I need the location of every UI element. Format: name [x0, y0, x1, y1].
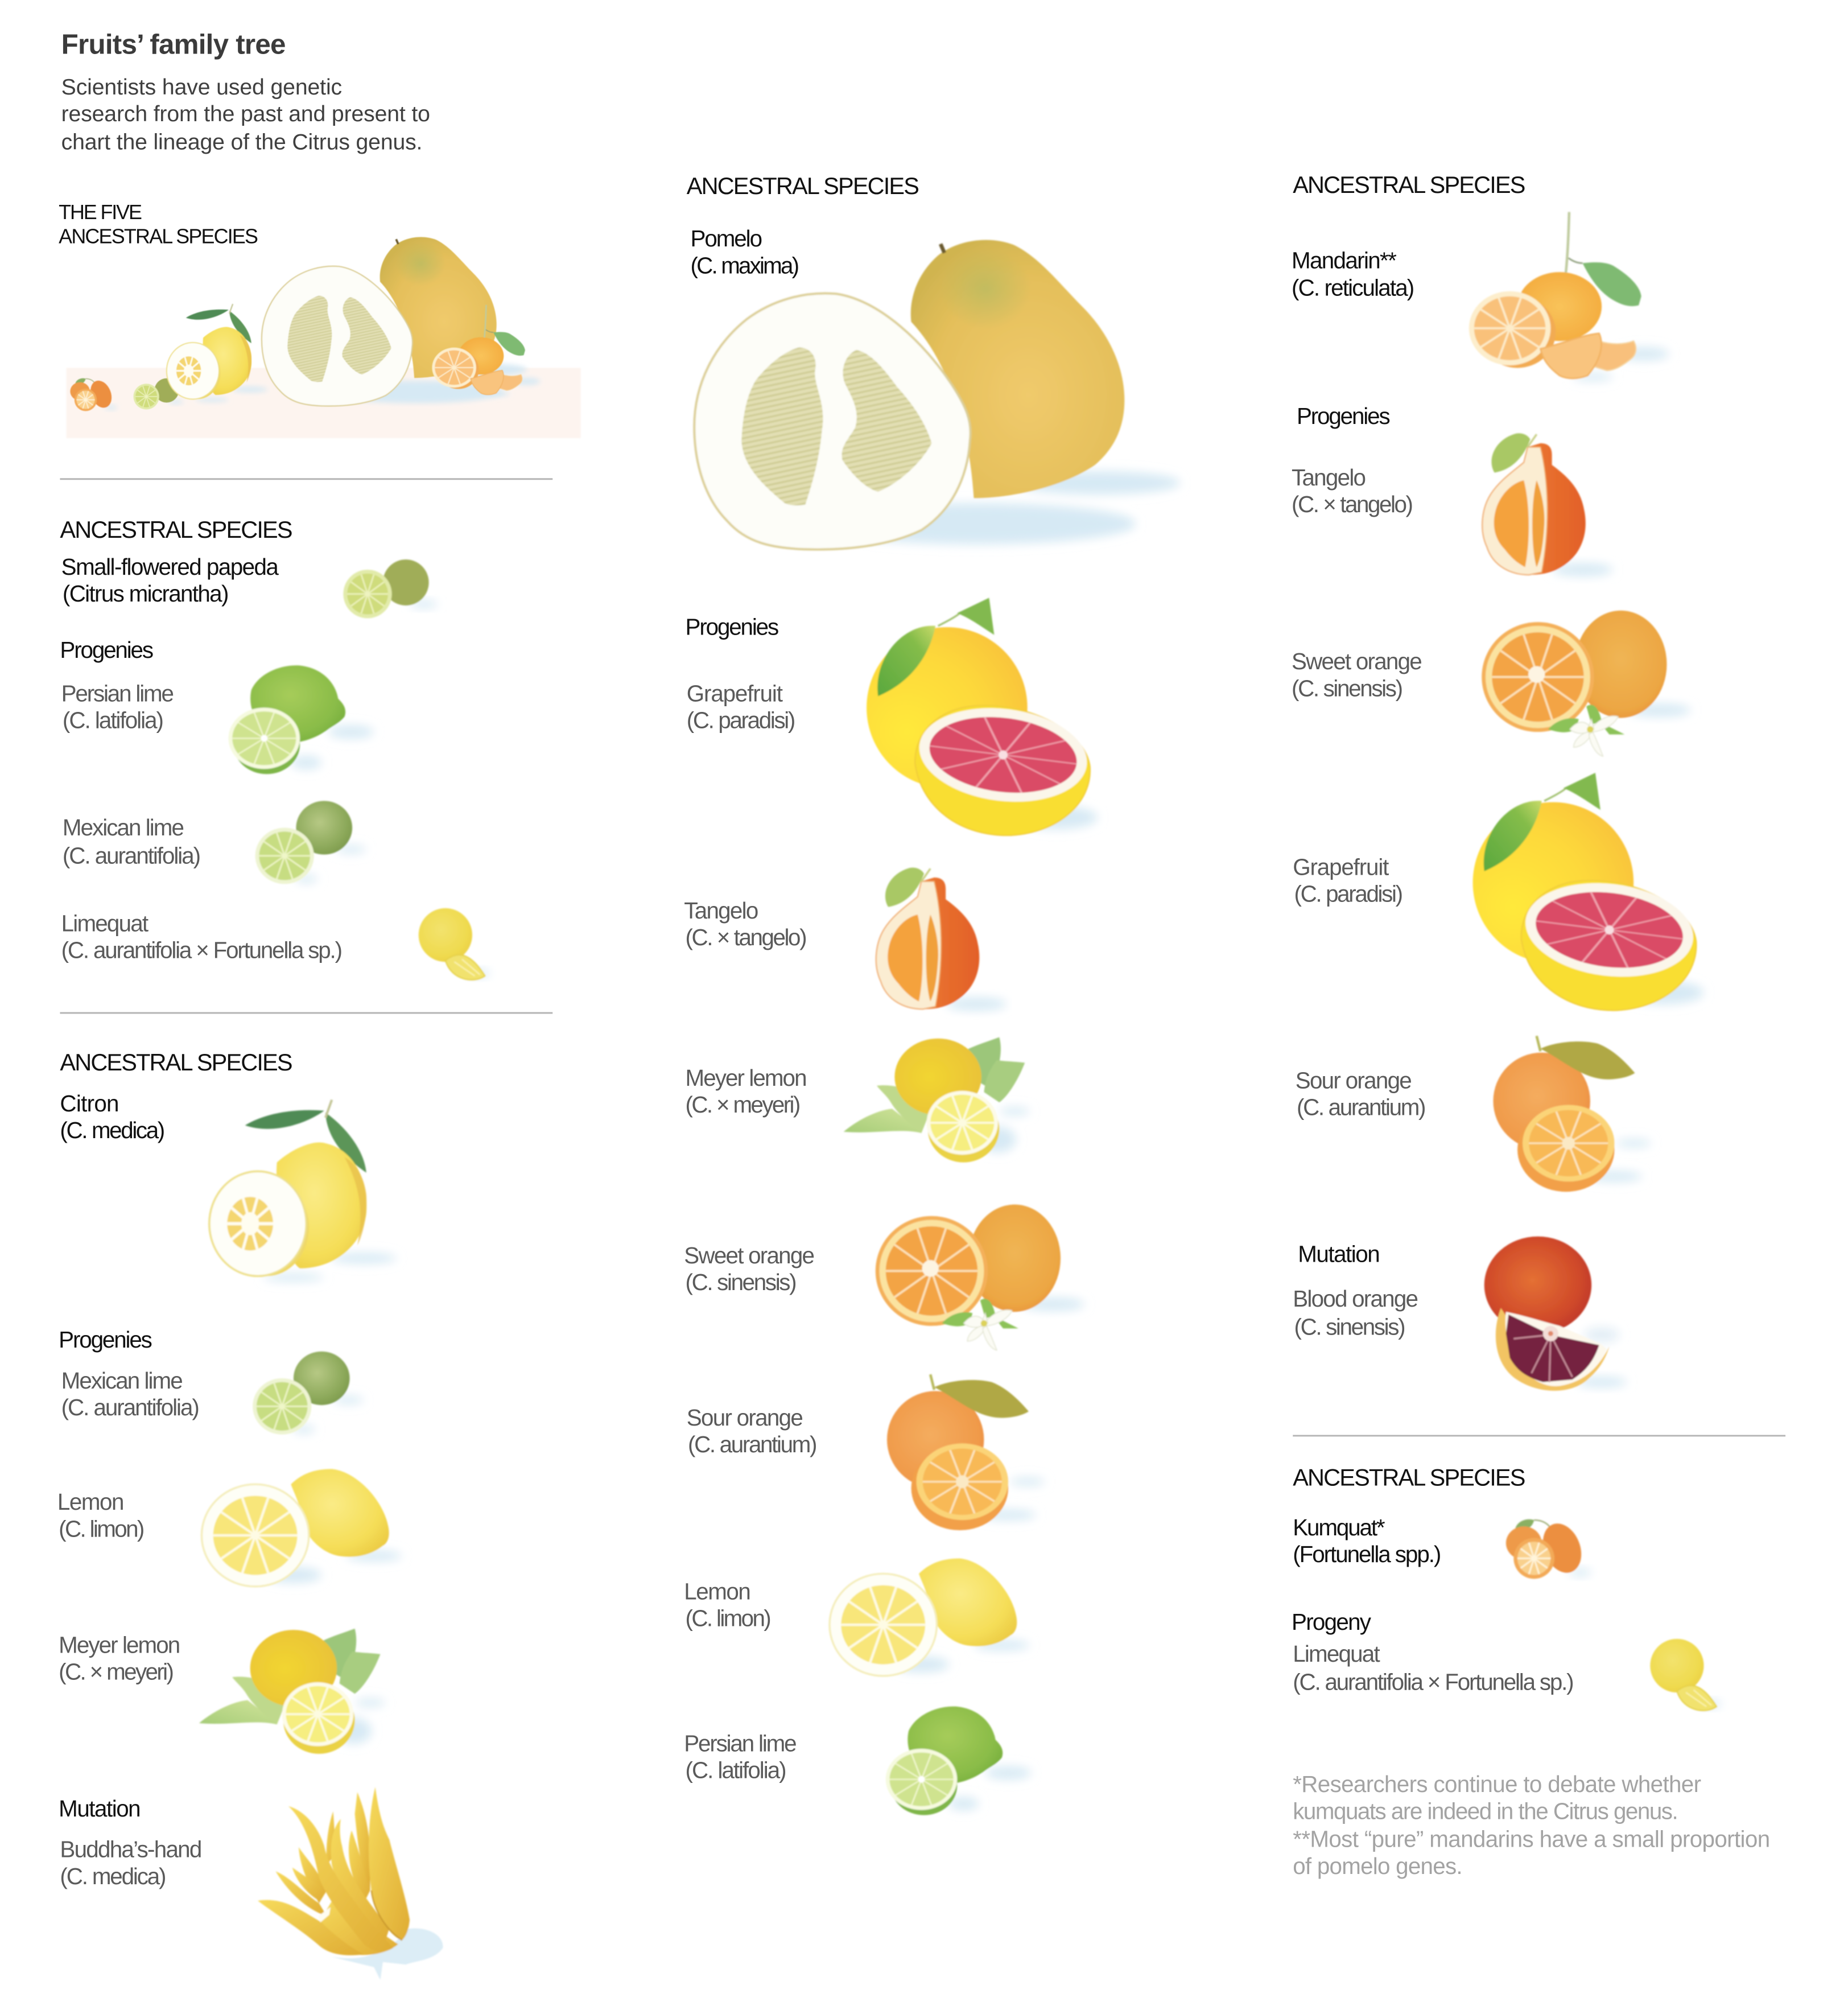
icon: limequat — [1650, 1639, 1722, 1711]
label: sweet orange: (C. sinensis) — [1292, 675, 1402, 701]
icon: pomelo — [694, 240, 1181, 550]
footnotes: **Most “pure” mandarins have a small proportion — [1293, 1826, 1770, 1852]
label: small-flowered papeda — [61, 554, 279, 607]
heading: ancestral species: ANCESTRAL SPECIES — [1293, 1464, 1525, 1491]
icon: sour orange — [887, 1374, 1045, 1530]
label: pomelo: Pomelo — [691, 225, 762, 252]
label: sweet orange — [1292, 648, 1422, 701]
label: sour orange: (C. aurantium) — [688, 1431, 817, 1457]
label: sour orange: Sour orange — [1296, 1067, 1412, 1093]
icon: meyer lemon — [844, 1037, 1030, 1163]
label: grapefruit: Grapefruit — [687, 680, 783, 706]
intro text: chart the lineage of the Citrus genus. — [61, 130, 422, 155]
icon: papeda fruit — [343, 559, 438, 618]
label: mexican lime — [63, 814, 200, 868]
icon: lemon — [201, 1469, 402, 1587]
icon: persian lime — [229, 665, 374, 774]
label: lemon — [57, 1489, 144, 1542]
label: grapefruit: (C. paradisi) — [687, 707, 795, 733]
label: mexican lime: (C. aurantifolia) — [61, 1394, 199, 1420]
label: lemon: (C. limon) — [686, 1605, 771, 1631]
label: mexican lime — [61, 1367, 199, 1420]
icon: blood orange — [1484, 1237, 1627, 1391]
icon: mandarin — [1469, 212, 1669, 381]
heading: progenies: Progenies — [60, 637, 153, 663]
icon: limequat — [419, 908, 490, 980]
heading: the five ancestral species — [59, 201, 258, 248]
label: small-flowered papeda: Small-flowered papeda — [61, 554, 279, 580]
label: buddha's-hand — [60, 1836, 201, 1889]
title: Fruits’ family tree — [61, 28, 286, 60]
heading: ancestral species: ANCESTRAL SPECIES — [60, 516, 292, 543]
label: small-flowered papeda: (Citrus micrantha) — [63, 580, 229, 607]
label: sweet orange: Sweet orange — [1292, 648, 1422, 674]
label: persian lime — [684, 1730, 797, 1783]
label: persian lime: Persian lime — [61, 680, 174, 706]
icon: buddha's-hand — [258, 1787, 443, 1980]
label: limequat — [61, 910, 342, 963]
label: lemon — [684, 1578, 771, 1631]
label: limequat — [1293, 1641, 1574, 1695]
label: limequat: Limequat — [61, 910, 148, 936]
label: kumquat: (Fortunella spp.) — [1293, 1541, 1441, 1567]
heading: the five ancestral species: ANCESTRAL SPECIES — [59, 225, 258, 248]
intro text: research from the past and present to — [61, 101, 430, 126]
footnotes — [1293, 1771, 1770, 1879]
footnotes: *Researchers continue to debate whether — [1293, 1771, 1701, 1797]
intro text — [61, 75, 430, 155]
label: persian lime: (C. latifolia) — [63, 707, 163, 733]
icon: mexican lime — [255, 801, 366, 884]
icon: kumquat — [1506, 1518, 1591, 1579]
heading: mutation: Mutation — [59, 1795, 141, 1822]
icon: tangelo — [876, 868, 1007, 1010]
heading: ancestral species: ANCESTRAL SPECIES — [687, 172, 919, 199]
label: meyer lemon — [59, 1632, 180, 1685]
label: persian lime: (C. latifolia) — [686, 1757, 786, 1783]
label: limequat: (C. aurantifolia × Fortunella sp.) — [1293, 1669, 1574, 1695]
label: lemon: Lemon — [57, 1489, 124, 1515]
footnotes: kumquats are indeed in the Citrus genus. — [1293, 1798, 1678, 1824]
panel: papeda lineage — [60, 516, 490, 980]
label: tangelo: (C. × tangelo) — [686, 924, 807, 950]
label: grapefruit: Grapefruit — [1293, 854, 1389, 880]
label: buddha's-hand: Buddha’s-hand — [60, 1836, 201, 1863]
label: pomelo — [691, 225, 799, 278]
heading: progenies: Progenies — [1297, 403, 1390, 429]
label: meyer lemon: (C. × meyeri) — [686, 1091, 800, 1118]
label: mexican lime: Mexican lime — [61, 1367, 183, 1394]
label: grapefruit — [687, 680, 795, 733]
label: buddha's-hand: (C. medica) — [60, 1863, 166, 1889]
label: mexican lime: Mexican lime — [63, 814, 184, 841]
heading: progenies: Progenies — [59, 1327, 152, 1353]
group illustration of five ancestral fruits — [67, 237, 581, 438]
footnotes: of pomelo genes. — [1293, 1853, 1463, 1879]
label: mandarin: (C. reticulata) — [1292, 275, 1414, 301]
label: tangelo: Tangelo — [1292, 464, 1366, 491]
label: tangelo: Tangelo — [684, 897, 758, 924]
panel: mandarin lineage — [1292, 171, 1704, 1391]
label: limequat: (C. aurantifolia × Fortunella sp.) — [61, 937, 342, 963]
label: sour orange — [1296, 1067, 1426, 1121]
label: citron: (C. medica) — [60, 1117, 164, 1143]
label: grapefruit: (C. paradisi) — [1294, 881, 1402, 907]
label: sweet orange: (C. sinensis) — [686, 1269, 797, 1295]
label: sweet orange: Sweet orange — [684, 1242, 814, 1268]
label: mandarin: Mandarin** — [1292, 247, 1397, 273]
label: persian lime: Persian lime — [684, 1730, 797, 1756]
panel: the five ancestral species — [59, 201, 581, 438]
label: tangelo: (C. × tangelo) — [1292, 491, 1413, 517]
heading: mutation: Mutation — [1298, 1241, 1380, 1267]
label: tangelo — [684, 897, 807, 950]
label: meyer lemon — [686, 1065, 807, 1118]
label: persian lime — [61, 680, 174, 733]
label: blood orange — [1293, 1286, 1418, 1340]
heading: ancestral species: ANCESTRAL SPECIES — [60, 1049, 292, 1076]
label: kumquat — [1293, 1514, 1441, 1567]
icon: tangelo — [1482, 433, 1613, 576]
icon: sweet orange — [876, 1205, 1085, 1350]
icon: sweet orange — [1482, 611, 1691, 756]
label: mexican lime: (C. aurantifolia) — [63, 842, 200, 868]
icon: grapefruit — [867, 598, 1098, 835]
label: citron: Citron — [60, 1090, 119, 1117]
label: meyer lemon: (C. × meyeri) — [59, 1659, 174, 1685]
label: lemon: Lemon — [684, 1578, 750, 1604]
panel: kumquat lineage — [1292, 1464, 1722, 1711]
label: blood orange: Blood orange — [1293, 1286, 1418, 1312]
label: sour orange: Sour orange — [687, 1404, 803, 1431]
icon: citron — [209, 1100, 397, 1281]
label: meyer lemon: Meyer lemon — [686, 1065, 807, 1091]
icon: persian lime — [886, 1707, 1031, 1815]
icon: meyer lemon — [199, 1629, 385, 1754]
intro text: Scientists have used genetic — [61, 75, 342, 100]
label: sweet orange — [684, 1242, 814, 1295]
icon: mexican lime — [253, 1352, 364, 1435]
icon: grapefruit — [1473, 773, 1704, 1011]
label: citron — [60, 1090, 164, 1143]
icon: sour orange — [1493, 1036, 1652, 1192]
label: limequat: Limequat — [1293, 1641, 1380, 1667]
label: grapefruit — [1293, 854, 1402, 907]
label: blood orange: (C. sinensis) — [1294, 1314, 1405, 1340]
icon: lemon — [830, 1558, 1030, 1676]
label: tangelo — [1292, 464, 1413, 517]
panel: pomelo lineage — [684, 172, 1181, 1815]
label: lemon: (C. limon) — [59, 1515, 144, 1542]
heading: ancestral species: ANCESTRAL SPECIES — [1293, 171, 1525, 198]
label: sour orange — [687, 1404, 817, 1457]
heading: progenies: Progenies — [686, 614, 778, 640]
label: kumquat: Kumquat* — [1293, 1514, 1385, 1540]
label: meyer lemon: Meyer lemon — [59, 1632, 180, 1658]
heading: the five ancestral species: THE FIVE — [59, 201, 142, 224]
label: sour orange: (C. aurantium) — [1297, 1094, 1426, 1121]
heading: progeny: Progeny — [1292, 1609, 1372, 1635]
panel: citron lineage — [57, 1049, 443, 1980]
label: mandarin — [1292, 247, 1414, 301]
label: pomelo: (C. maxima) — [691, 252, 799, 278]
